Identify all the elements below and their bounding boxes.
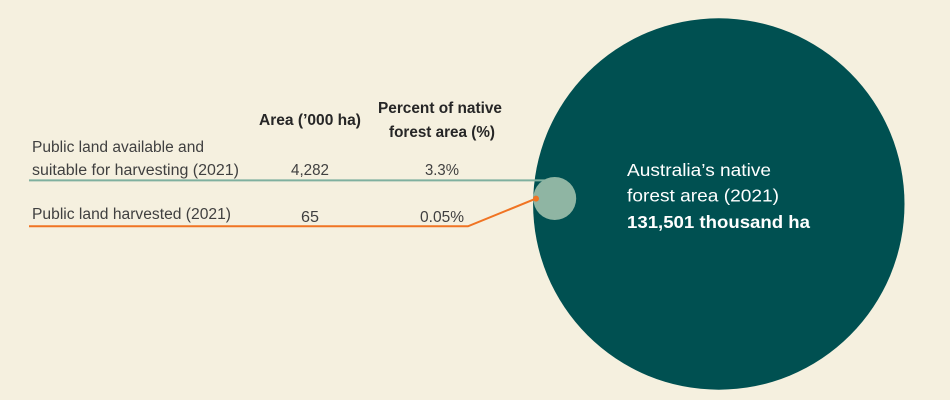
circle label: forest area (2021) [627,186,779,206]
value: available percent: 3.3% [425,162,459,179]
column heading: percent: Percent of native [378,100,502,117]
circle label: 131,501 thousand ha [627,212,810,232]
row label: available and suitable: suitable for harvesting (2021) [32,162,239,179]
column heading: percent: forest area (%) [389,124,495,141]
circle label: Australia’s native [627,160,771,180]
row label: harvested: Public land harvested (2021) [32,206,231,223]
small circle: public land available [533,177,576,220]
column heading: percent [378,100,502,141]
large circle: native forest area [533,18,904,390]
column heading: area: Area (’000 ha) [259,112,361,129]
circle label [627,160,810,232]
green leader line [29,179,545,181]
orange leader line [29,196,539,226]
value: harvested percent: 0.05% [420,209,464,226]
value: available area: 4,282 [291,162,329,179]
row label: available and suitable [32,139,239,179]
value: harvested area: 65 [301,209,319,226]
row label: available and suitable: Public land available and [32,139,204,156]
